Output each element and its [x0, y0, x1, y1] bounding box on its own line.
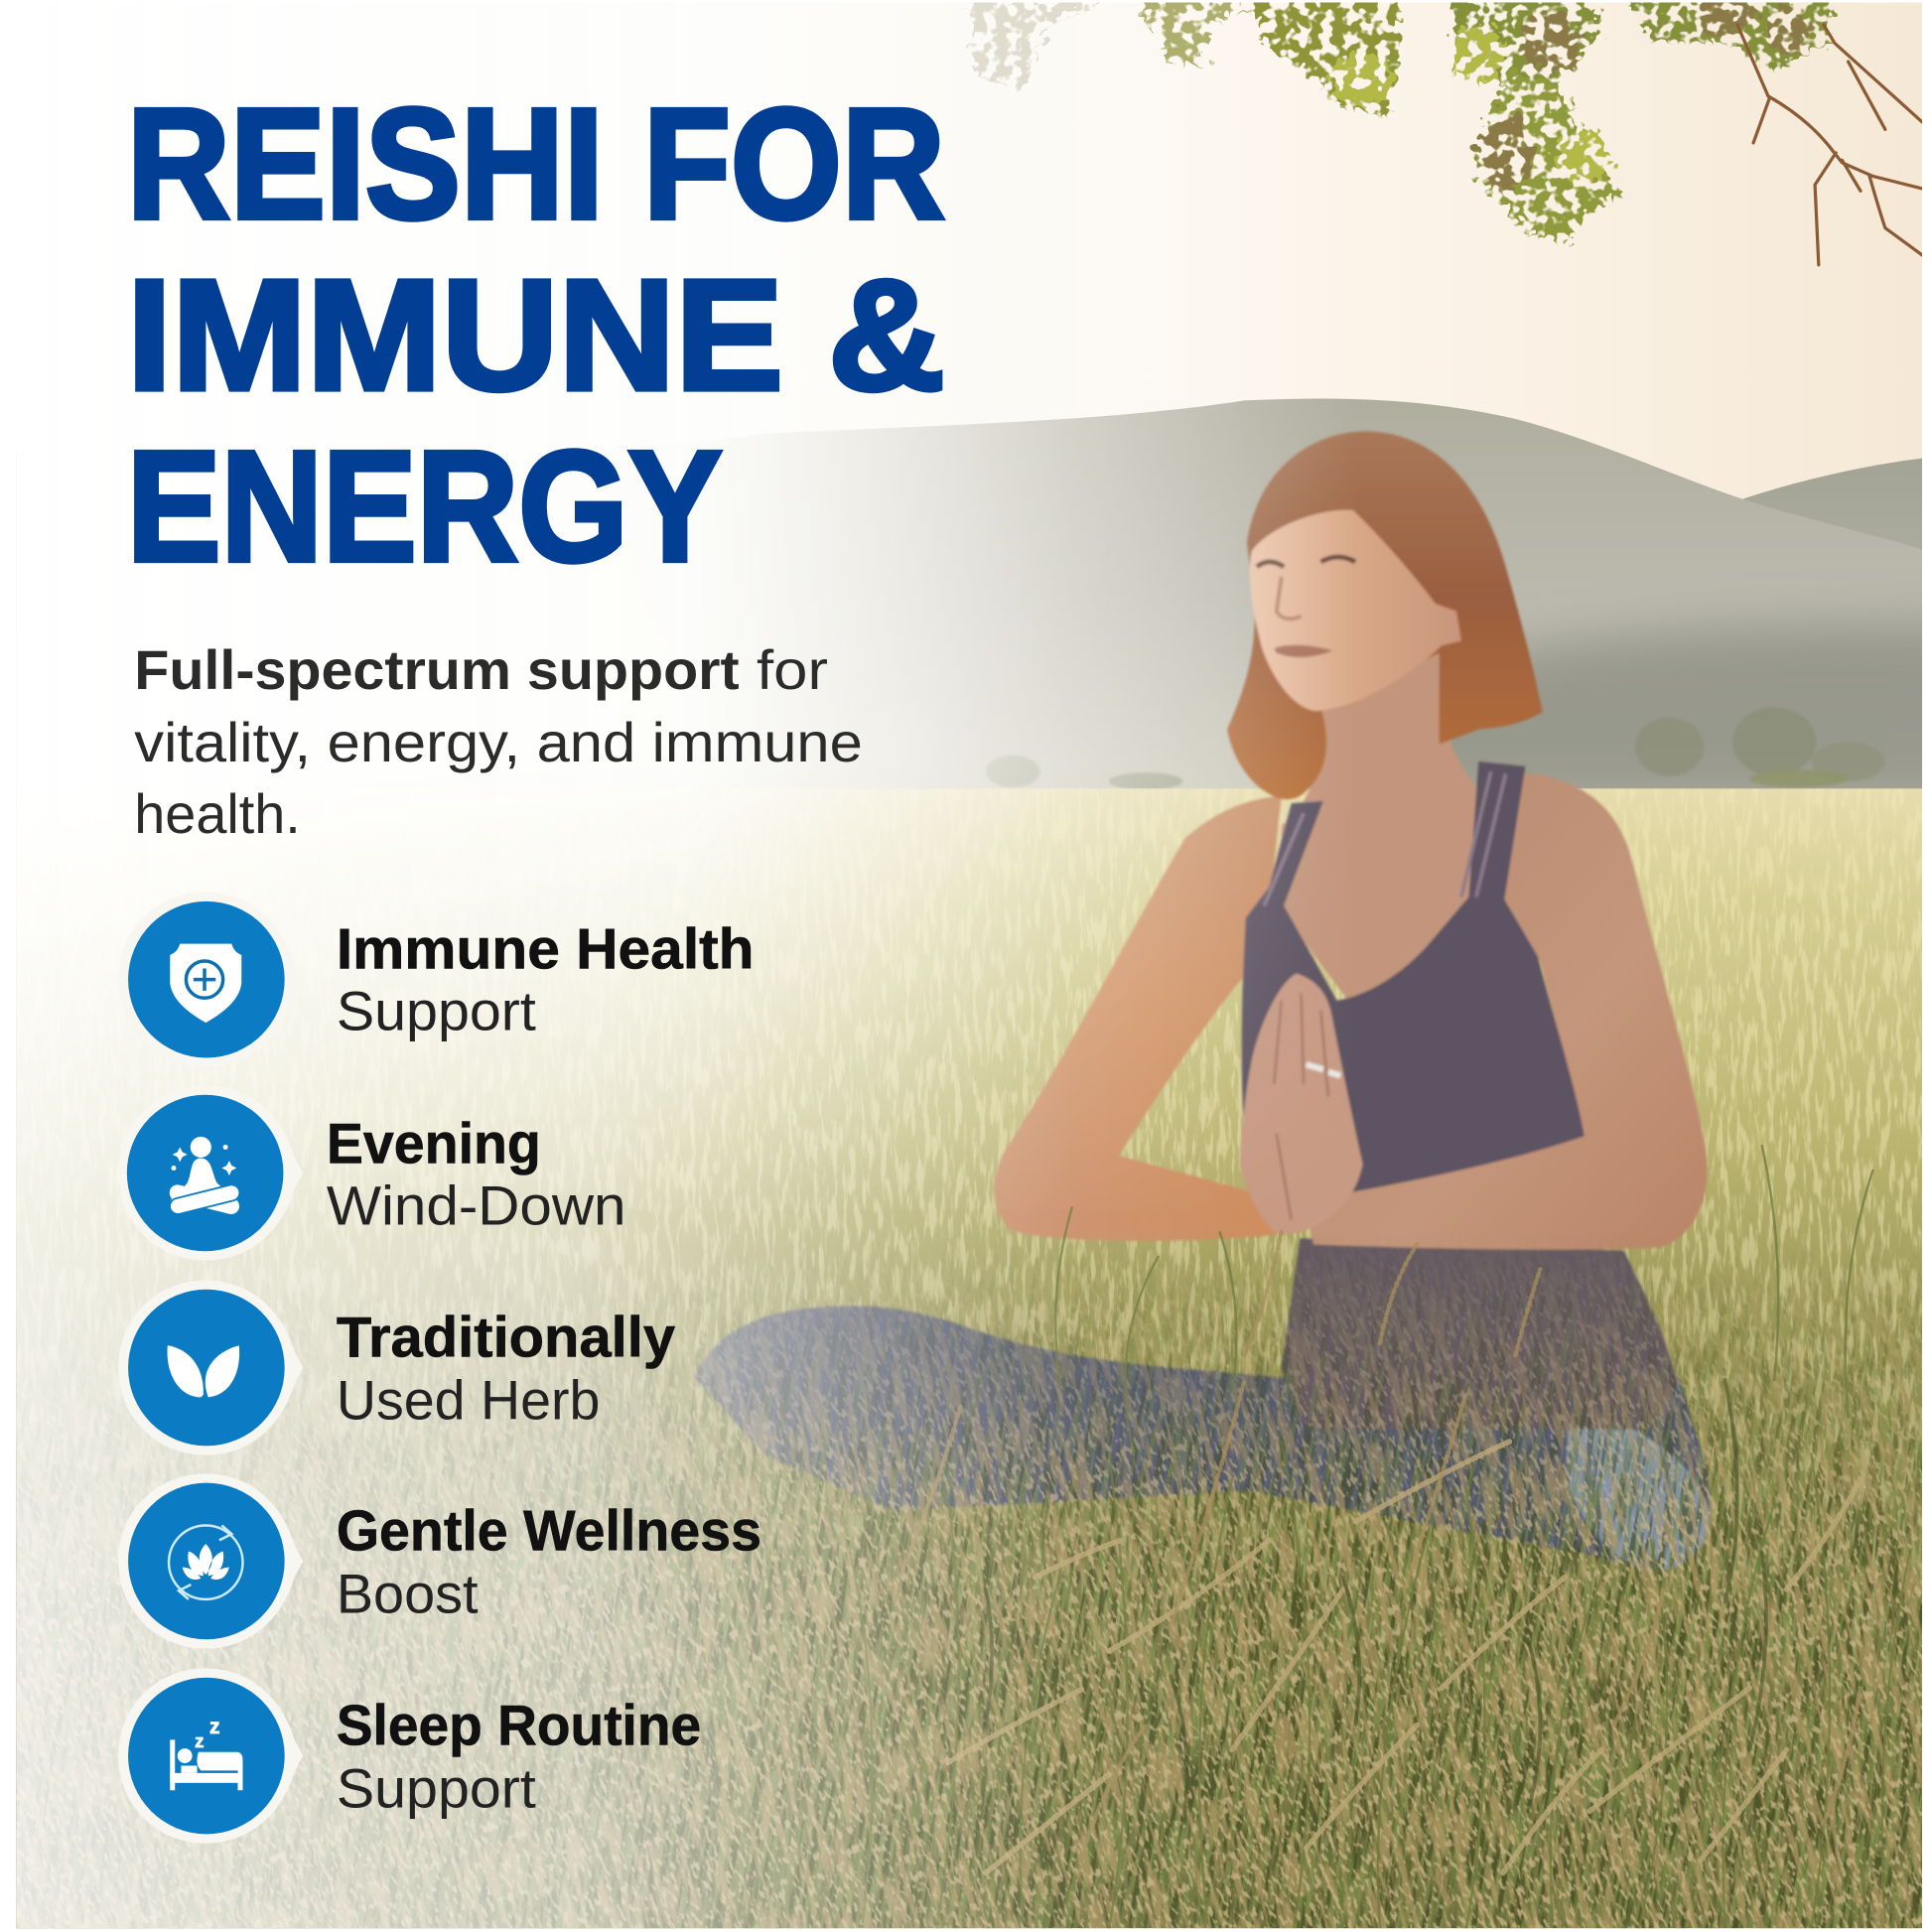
tree canopy at top right [967, 0, 1922, 265]
intro paragraph [134, 638, 863, 845]
label: Evening [327, 1113, 541, 1176]
field [16, 788, 1922, 1928]
main mountain ridge [16, 399, 1922, 813]
lips [1274, 645, 1333, 657]
title line 1: REISHI FOR [127, 75, 945, 252]
nose [1277, 577, 1302, 619]
label: Sleep Routine [337, 1694, 701, 1757]
lower hazy hills [1449, 601, 1922, 788]
grass blades [850, 1146, 1910, 1928]
praying hands [1240, 973, 1363, 1234]
label: Gentle Wellness [337, 1499, 761, 1563]
sky [1084, 2, 1922, 498]
badge ring [118, 893, 303, 1067]
rings [1307, 1064, 1340, 1075]
dark grass layer [16, 1232, 1922, 1928]
left arm [995, 796, 1282, 1241]
foreground grass texture [16, 1232, 1922, 1928]
sublabel: Support [337, 980, 536, 1042]
benefit: sleep routine support [118, 1668, 701, 1844]
green grass layer [16, 1232, 1922, 1928]
knee highlight [1565, 1412, 1711, 1571]
lower top and hips [1282, 1238, 1678, 1430]
benefit: evening wind-down [118, 1085, 625, 1261]
white fade behind the title [16, 2, 1359, 1210]
icon: lotus in cycle [169, 1525, 242, 1599]
hair back [1227, 431, 1543, 799]
title line 3: ENERGY [127, 418, 722, 595]
tan grass layer [16, 1232, 1922, 1928]
badge circle [127, 1095, 283, 1251]
benefit: gentle wellness boost [118, 1473, 761, 1649]
bold lead: Full-spectrum support [134, 638, 740, 701]
icon: person sleeping in bed: z [209, 1716, 220, 1738]
line 2: vitality, energy, and immune [134, 711, 863, 773]
label: Immune Health [337, 917, 755, 981]
sublabel: Boost [337, 1563, 479, 1625]
badge circle [128, 1483, 285, 1639]
strap stripes [1264, 771, 1506, 905]
eyes [1257, 557, 1355, 567]
woman meditating [695, 431, 1711, 1571]
finger lines [1274, 993, 1328, 1220]
far hill on right [1742, 459, 1922, 550]
seed head speckle [16, 1232, 1922, 1928]
face [1250, 510, 1461, 711]
hanging cluster [1472, 73, 1620, 246]
white fade over left side [16, 2, 1261, 1928]
sublabel: Support [337, 1757, 536, 1820]
far field golden speckle [16, 788, 1922, 1928]
icon: two leaves [168, 1345, 239, 1397]
badge ring [118, 1668, 303, 1844]
sublabel: Used Herb [337, 1369, 600, 1432]
line 3: health. [134, 782, 301, 845]
badge ring [118, 1473, 303, 1649]
benefit: traditionally used herb [118, 1280, 675, 1455]
chest and neck [1282, 653, 1478, 1011]
legs [695, 1306, 1711, 1571]
brown shaded foliage [1478, 0, 1809, 194]
upper right foliage [1448, 2, 1835, 88]
label: Traditionally [337, 1306, 675, 1369]
icon: meditating figure [168, 1137, 241, 1216]
badge circle [128, 901, 285, 1057]
mid foliage [1140, 2, 1269, 69]
icon: shield with plus [170, 944, 241, 1023]
badge ring [118, 1085, 303, 1261]
faded left foliage [967, 2, 1109, 92]
rest of line 1: for [757, 638, 828, 701]
badge ring [118, 1280, 303, 1455]
central foliage [1247, 2, 1401, 118]
light leaves [1332, 27, 1610, 188]
title [127, 75, 945, 595]
right arm [1307, 773, 1708, 1250]
badge circle [128, 1290, 285, 1446]
sublabel: Wind-Down [327, 1174, 625, 1237]
icon: person sleeping in bed [170, 1716, 242, 1790]
badge circle [128, 1678, 285, 1834]
distant tree line [986, 707, 1884, 788]
icon: person sleeping in bed: z [195, 1730, 204, 1751]
benefit: immune health [118, 893, 755, 1067]
branches [1737, 25, 1922, 265]
title line 2: IMMUNE & [127, 246, 945, 423]
tank top [1242, 761, 1585, 1200]
